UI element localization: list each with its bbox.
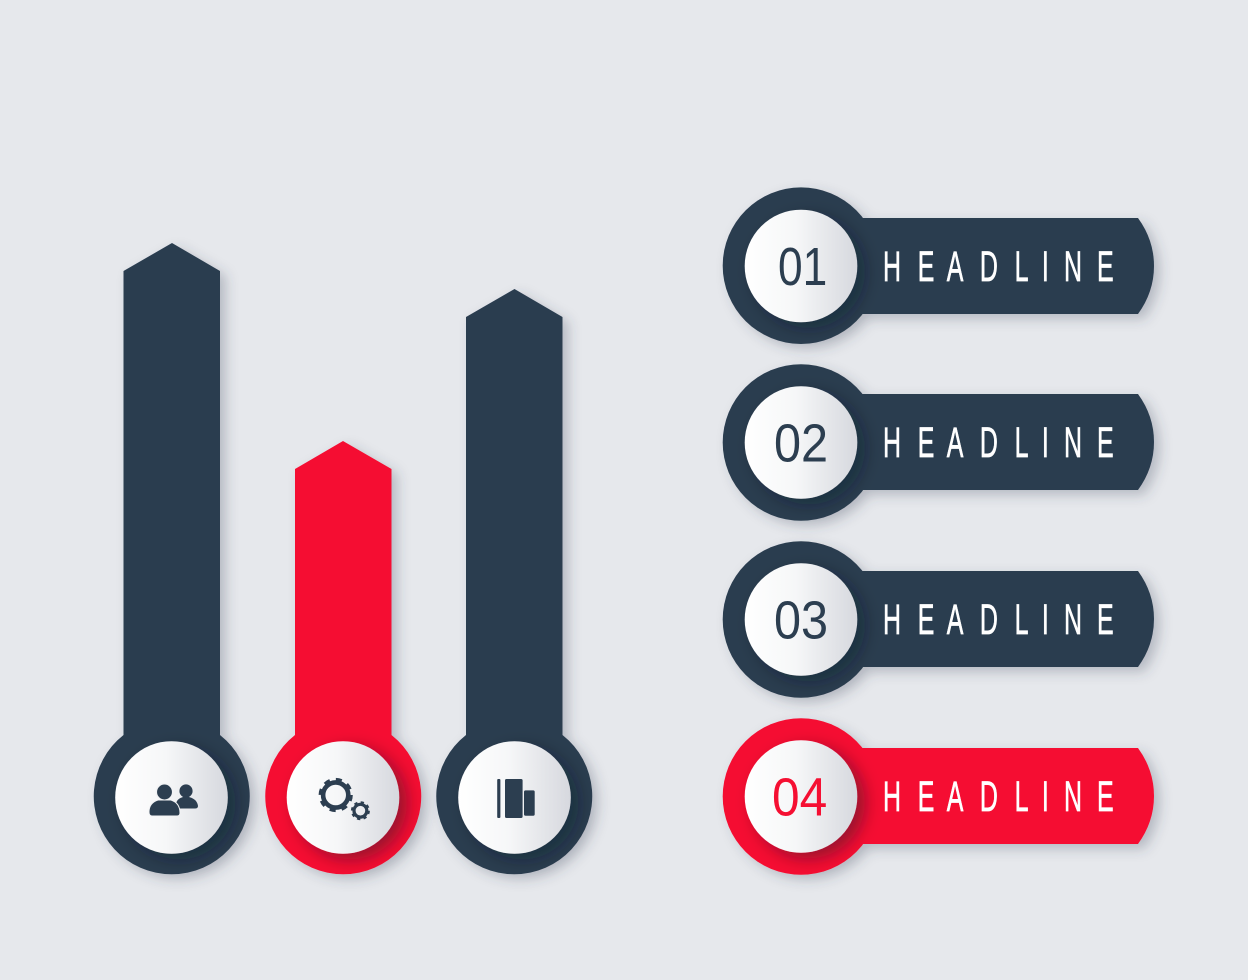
label 01	[723, 187, 1154, 344]
arrow column 2: gears	[265, 441, 421, 874]
number 03: 03	[774, 589, 828, 650]
arrow with ring 3	[436, 289, 592, 874]
ring and banner 02	[723, 364, 1154, 521]
label 02	[723, 364, 1154, 521]
disc 2	[287, 741, 399, 854]
headline 02: HEADLINE	[883, 419, 1114, 467]
headline 01: HEADLINE	[883, 243, 1114, 291]
disc 03	[745, 563, 857, 676]
label 03	[723, 541, 1154, 698]
ring and banner 01	[723, 187, 1154, 344]
number 02: 02	[774, 412, 828, 473]
disc 01	[745, 210, 857, 322]
headline 04: HEADLINE	[883, 773, 1114, 821]
headline 03: HEADLINE	[883, 596, 1114, 644]
icon: people	[149, 784, 198, 816]
label 04	[723, 718, 1154, 875]
arrow with ring 2	[265, 441, 421, 874]
disc 02	[745, 386, 857, 499]
number 04: 04	[772, 767, 827, 827]
arrow column 3: book	[436, 289, 592, 874]
disc 1	[115, 741, 228, 854]
icon: gears	[320, 780, 369, 819]
ring and banner 03	[723, 541, 1154, 698]
disc 3	[458, 741, 571, 854]
icon: book	[497, 779, 535, 818]
arrow with ring 1	[94, 243, 250, 874]
ring and banner 04	[723, 718, 1154, 875]
number 01: 01	[778, 237, 827, 297]
disc 04	[745, 740, 857, 853]
arrow column 1: people	[94, 243, 250, 874]
